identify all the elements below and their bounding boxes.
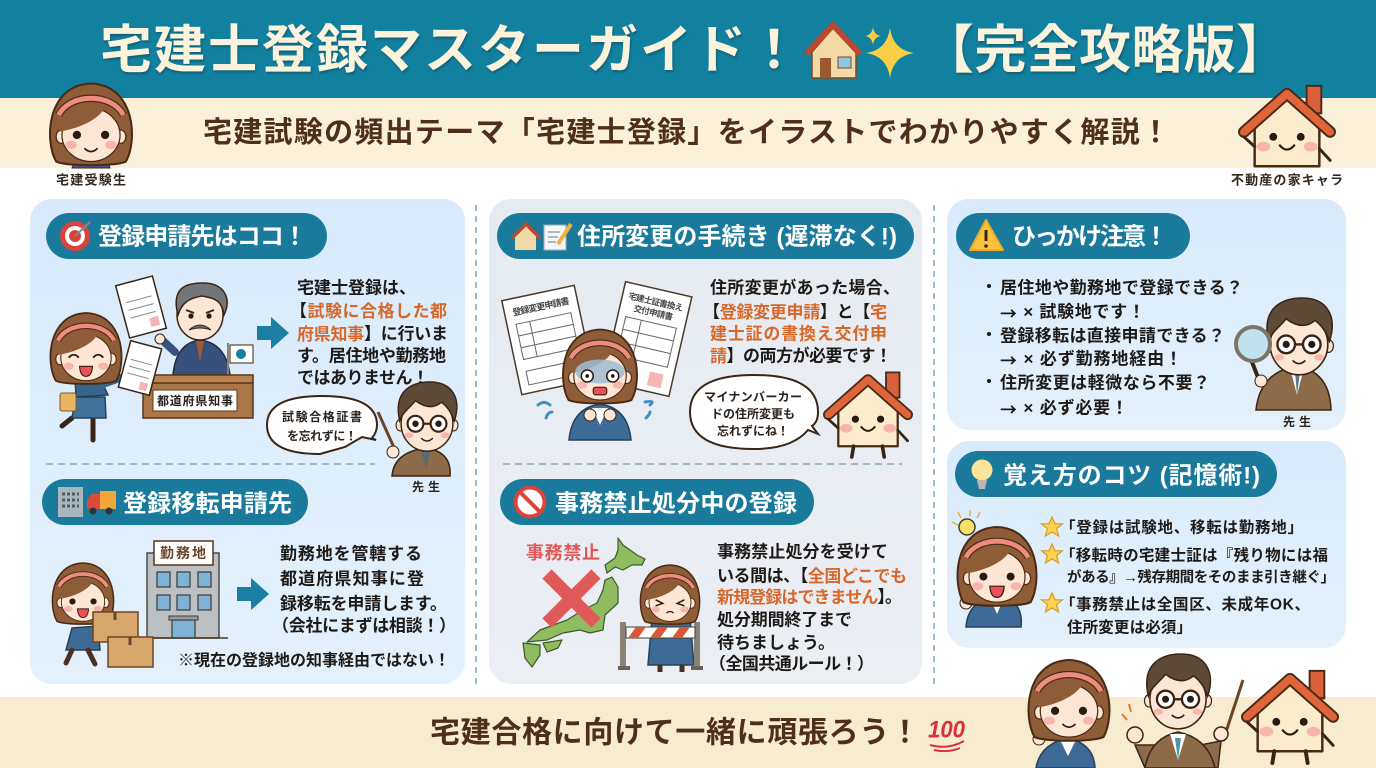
text block: trick list: → × 試験地です！ bbox=[1000, 300, 1145, 324]
arrow bbox=[237, 578, 269, 610]
speech bubble: certificate bbox=[267, 396, 377, 454]
text block: trick list: 登録移転は直接申請できる？ bbox=[1000, 326, 1225, 346]
speech bubble: my number card: ドの住所変更も bbox=[711, 406, 795, 421]
text block: registration: す。居住地や勤務地 bbox=[297, 346, 446, 366]
heading: trick warnings: ひっかけ注意！ bbox=[1012, 224, 1168, 250]
speech bubble: my number card: 忘れずにね！ bbox=[717, 423, 789, 438]
text block: memory tips: 住所変更は必須」 bbox=[1067, 618, 1192, 636]
heading: transfer bbox=[42, 479, 308, 525]
text block: suspension: （全国共通ルール！） bbox=[709, 654, 874, 674]
text block: trick list: → × 必ず勤務地経由！ bbox=[1000, 346, 1182, 372]
character: exam candidate: 宅建受験生 bbox=[56, 172, 126, 188]
character: teacher with pointer: 先生 bbox=[412, 479, 440, 494]
speech bubble: my number card: マイナンバーカー bbox=[704, 390, 802, 404]
title bbox=[100, 22, 1288, 80]
illustration: application forms: 宅建士証書換え bbox=[627, 291, 684, 313]
illustration: candidate at barrier bbox=[618, 565, 703, 672]
character: house with bubble bbox=[828, 372, 908, 457]
text block: registration: ではありません！ bbox=[297, 368, 429, 388]
heading: trick warnings bbox=[956, 213, 1190, 259]
panel: memory tips bbox=[947, 441, 1346, 648]
text block: memory tips: がある』→残存期間をそのまま引き継ぐ」 bbox=[1067, 568, 1335, 586]
text block: transfer: 勤務地を管轄する bbox=[280, 544, 422, 564]
character: footer candidate bbox=[1029, 660, 1109, 768]
text block: memory tips: 「登録は試験地、移転は勤務地」 bbox=[1060, 518, 1303, 536]
character: teacher with pointer bbox=[378, 382, 458, 494]
text block: trick list bbox=[987, 278, 1243, 420]
character: house mascot: 不動産の家キャラ bbox=[1231, 172, 1343, 188]
character: footer teacher bbox=[1122, 654, 1243, 768]
text block: suspension: 処分期間終了まで bbox=[717, 610, 852, 630]
subtitle band bbox=[0, 98, 1376, 168]
title: 【完全攻略版】 bbox=[922, 22, 1288, 80]
panel: middle column bbox=[489, 199, 922, 684]
footer message: 宅建合格に向けて一緒に頑張ろう！ bbox=[430, 716, 920, 750]
heading: memory tips bbox=[955, 451, 1277, 497]
text block: address change: 建士証の書換え交付申 bbox=[710, 324, 887, 344]
footer band bbox=[0, 697, 1376, 768]
heading: memory tips: 覚え方のコツ (記憶術!) bbox=[1003, 462, 1260, 490]
speech bubble: certificate: 試験合格証書 bbox=[282, 409, 362, 424]
illustration: application forms: 交付申請書 bbox=[633, 303, 674, 322]
text block: suspension bbox=[709, 542, 907, 674]
text block: address change bbox=[703, 278, 900, 366]
character: teacher with magnifier bbox=[1236, 298, 1333, 429]
text block: trick list: → × 必ず必要！ bbox=[1000, 396, 1128, 420]
heading: registration office bbox=[46, 213, 327, 259]
heading: transfer: 登録移転申請先 bbox=[123, 490, 292, 518]
text block: suspension: 事務禁止処分を受けて bbox=[717, 542, 888, 562]
text block: trick list: 住所変更は軽微なら不要？ bbox=[1000, 374, 1210, 392]
panel: trick warnings bbox=[947, 199, 1346, 430]
text block: trick list: 居住地や勤務地で登録できる？ bbox=[1000, 278, 1243, 298]
illustration: application forms: 登録変更申請書 bbox=[511, 295, 570, 318]
subtitle: 宅建試験の頻出テーマ「宅建士登録」をイラストでわかりやすく解説！ bbox=[203, 116, 1170, 149]
character: exam candidate bbox=[50, 84, 132, 188]
text block: memory tips: 「移転時の宅建士証は『残り物には福 bbox=[1060, 546, 1328, 564]
text block: address change: 請】の両方が必要です！ bbox=[710, 346, 892, 366]
speech bubble: certificate: を忘れずに！ bbox=[287, 428, 357, 443]
arrow bbox=[257, 317, 289, 349]
icon: house emoji bbox=[806, 25, 860, 78]
column dividers bbox=[476, 205, 934, 684]
text block: suspension: 新規登録はできません】。 bbox=[717, 588, 902, 606]
text block: transfer: ※現在の登録地の知事経由ではない！ bbox=[178, 650, 450, 670]
character: footer house bbox=[1247, 671, 1333, 763]
text block: transfer: （会社にまずは相談！） bbox=[272, 616, 456, 636]
heading: suspension bbox=[500, 479, 814, 525]
illustration: moving boxes to workplace bbox=[52, 541, 228, 667]
speech bubble: my number card bbox=[690, 375, 818, 449]
text block: suspension: いる間は、【全国どこでも bbox=[717, 566, 907, 586]
illustration: application forms bbox=[502, 282, 692, 396]
heading: registration office: 登録申請先はココ！ bbox=[98, 224, 307, 250]
panel: left column bbox=[30, 199, 465, 684]
title: 宅建士登録マスターガイド！ bbox=[100, 22, 800, 80]
character: worried candidate bbox=[538, 330, 652, 440]
illustration: moving boxes to workplace: 勤務地 bbox=[160, 545, 206, 561]
text block: registration: 【試験に合格した都 bbox=[290, 302, 447, 320]
character: candidate with idea bbox=[952, 510, 1036, 627]
text block: memory tips: 「事務禁止は全国区、未成年OK、 bbox=[1060, 594, 1310, 614]
illustration: japan map with cross bbox=[523, 538, 645, 667]
illustration: candidate and governor bbox=[50, 276, 253, 440]
character: teacher with magnifier: 先生 bbox=[1283, 414, 1311, 429]
text block: registration: 府県知事】に行いま bbox=[297, 324, 448, 344]
illustration: japan map with cross: 事務禁止 bbox=[526, 543, 600, 563]
heading: address change bbox=[497, 213, 914, 259]
text block: registration bbox=[290, 278, 448, 388]
icon: hundred points: 100 bbox=[928, 716, 966, 744]
text block: transfer: 都道府県知事に登 bbox=[280, 570, 424, 588]
icon: sparkles bbox=[865, 27, 914, 78]
heading: suspension: 事務禁止処分中の登録 bbox=[555, 490, 797, 518]
text block: registration: 宅建士登録は、 bbox=[297, 278, 416, 298]
illustration: candidate and governor: 都道府県知事 bbox=[157, 393, 233, 408]
heading: address change: 住所変更の手続き (遅滞なく!) bbox=[577, 224, 897, 250]
header band bbox=[0, 0, 1376, 98]
text block: suspension: 待ちましょう。 bbox=[717, 634, 835, 652]
text block: address change: 【登録変更申請】と【宅 bbox=[703, 302, 887, 322]
text block: transfer bbox=[178, 544, 456, 670]
text block: address change: 住所変更があった場合、 bbox=[710, 278, 900, 298]
text block: transfer: 録移転を申請します。 bbox=[280, 594, 447, 614]
text block: memory tips bbox=[1042, 517, 1335, 636]
character: house mascot bbox=[1231, 86, 1343, 188]
